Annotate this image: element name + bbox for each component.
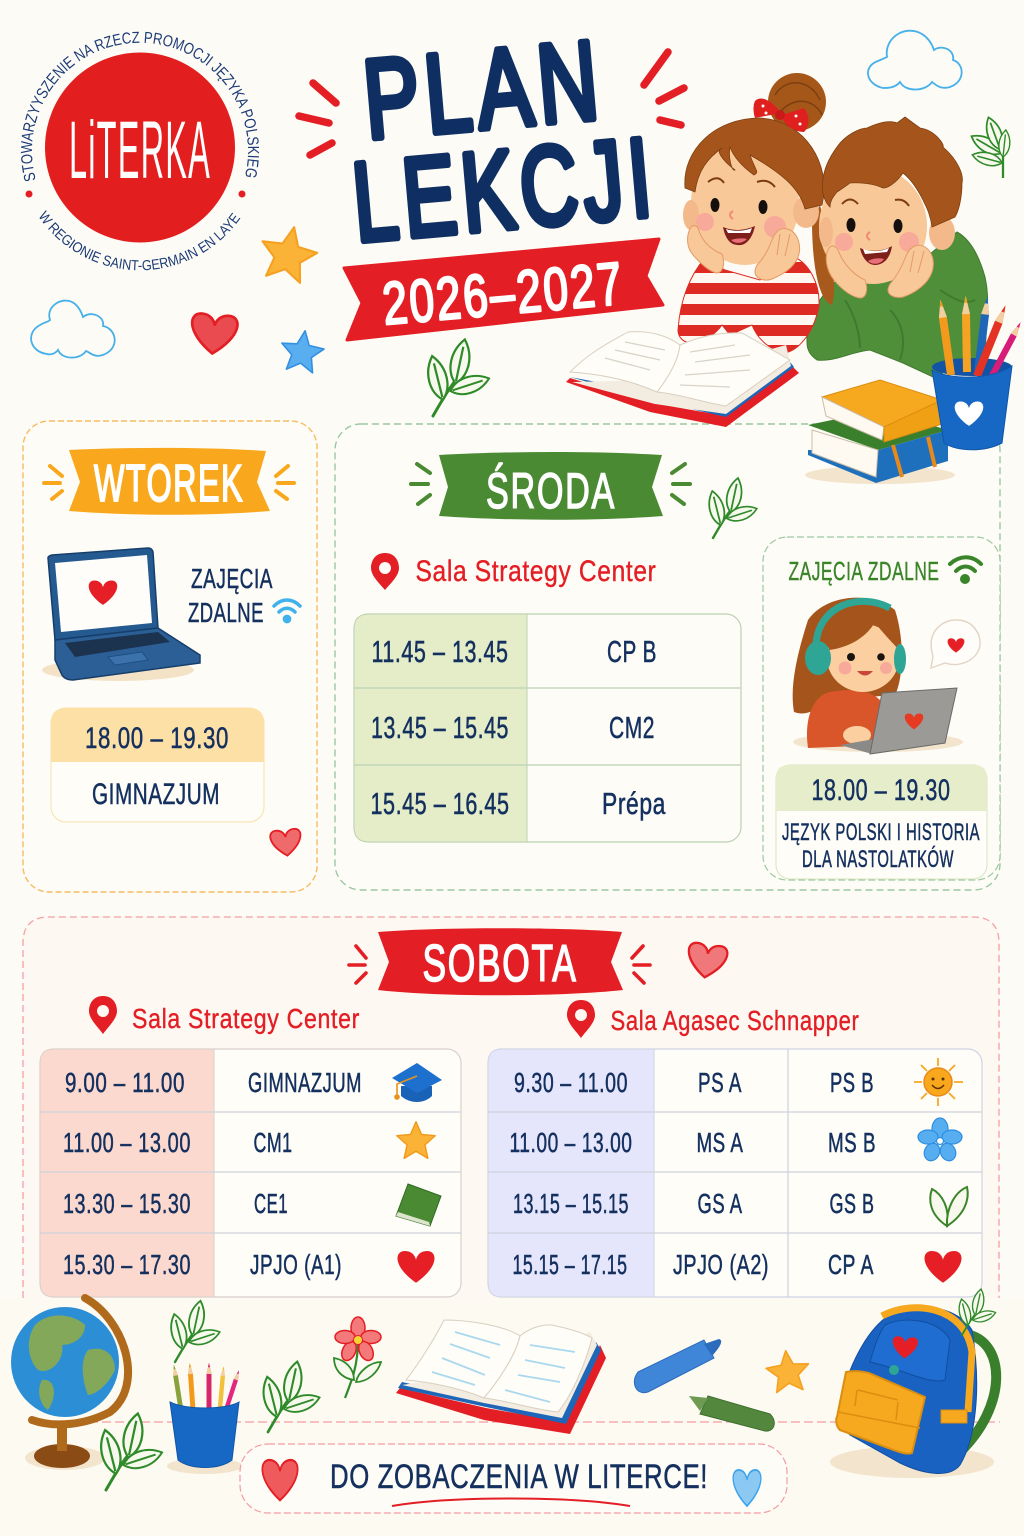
icon: green crayon bbox=[689, 1396, 774, 1431]
icon: map pin bbox=[567, 1000, 595, 1038]
right saturday timetable: CP A bbox=[828, 1249, 874, 1280]
right saturday timetable: 13.15 – 15.15 bbox=[513, 1188, 629, 1219]
left saturday timetable: 15.30 – 17.30 bbox=[63, 1249, 191, 1280]
card: remote language class: ZAJĘCIA ZDALNE bbox=[788, 556, 940, 586]
sroda timetable: 11.45 – 13.45 bbox=[372, 634, 508, 669]
boy head bbox=[819, 117, 962, 298]
icon: flower bbox=[334, 1317, 381, 1398]
right saturday timetable: PS A bbox=[698, 1067, 742, 1098]
icon: blue laptop with heart bbox=[42, 548, 200, 681]
panel: sobota bbox=[23, 917, 1000, 1422]
sobota ribbon heading bbox=[349, 928, 650, 995]
right saturday timetable: MS A bbox=[696, 1127, 744, 1158]
illustration: pencil cup bbox=[167, 1363, 243, 1474]
icon: orange star bbox=[256, 221, 321, 285]
icon: leaf branch bbox=[167, 1299, 222, 1362]
remote class schedule: 18.00 – 19.30 bbox=[812, 774, 950, 807]
illustration: stacked books bbox=[805, 380, 955, 484]
sobota ribbon heading: SOBOTA bbox=[422, 935, 578, 993]
boy hoodie bbox=[807, 232, 988, 377]
remote lessons label: ZDALNE bbox=[188, 597, 264, 628]
right saturday timetable: GS B bbox=[830, 1188, 874, 1219]
logo: literka: W REGIONIE SAINT-GERMAIN EN LAYE bbox=[40, 210, 240, 270]
icon: leaf branch on backpack bbox=[956, 1288, 997, 1335]
title: plan lekcji bbox=[348, 17, 662, 265]
sroda ribbon heading: ŚRODA bbox=[486, 462, 616, 519]
footer pill bbox=[240, 1444, 787, 1513]
icon: leaf branch bbox=[706, 477, 759, 538]
left saturday timetable: GIMNAZJUM bbox=[248, 1067, 362, 1098]
icon: leaf branch top right bbox=[968, 115, 1011, 178]
right saturday timetable: 15.15 – 17.15 bbox=[512, 1249, 628, 1280]
sroda timetable bbox=[354, 614, 741, 842]
right saturday timetable: 11.00 – 13.00 bbox=[510, 1127, 632, 1158]
location: sala agasec schnapper: Sala Agasec Schnapper bbox=[610, 1005, 860, 1036]
illustration: globe bbox=[11, 1298, 128, 1470]
icon: map pin bbox=[89, 996, 117, 1034]
icon: red heart bbox=[925, 1251, 961, 1283]
icon: map pin bbox=[371, 553, 399, 590]
illustration: open book bbox=[566, 332, 799, 427]
icon: graduation cap bbox=[392, 1063, 442, 1102]
left saturday timetable: JPJO (A1) bbox=[250, 1249, 342, 1280]
left saturday timetable: 11.00 – 13.00 bbox=[63, 1127, 191, 1158]
location: sala strategy center bbox=[89, 996, 360, 1034]
wtorek schedule card: GIMNAZJUM bbox=[92, 778, 220, 811]
illustration: open book bottom bbox=[396, 1320, 606, 1434]
icon: sun bbox=[914, 1058, 963, 1106]
location: sala strategy center: Sala Strategy Center bbox=[416, 555, 656, 588]
sroda timetable: CP B bbox=[607, 634, 657, 669]
right saturday timetable: 9.30 – 11.00 bbox=[514, 1067, 628, 1098]
location: sala strategy center: Sala Strategy Center bbox=[132, 1003, 360, 1034]
left saturday timetable: 13.30 – 15.30 bbox=[63, 1188, 191, 1219]
right saturday timetable: PS B bbox=[830, 1067, 874, 1098]
left saturday timetable bbox=[40, 1049, 461, 1297]
illustration: girl and boy bbox=[670, 73, 988, 377]
footer pill: DO ZOBACZENIA W LITERCE! bbox=[330, 1458, 708, 1496]
remote lessons label bbox=[188, 563, 300, 628]
panel: wtorek bbox=[23, 421, 317, 892]
remote class schedule bbox=[776, 765, 987, 879]
icon: light blue wifi bbox=[274, 600, 300, 622]
remote lessons label: ZAJĘCIA bbox=[191, 563, 273, 594]
icon: orange star bbox=[397, 1122, 435, 1158]
icon: red heart bbox=[190, 313, 238, 355]
right saturday timetable bbox=[488, 1049, 982, 1297]
icon: leaf branch bbox=[423, 338, 491, 416]
icon: green leaves bbox=[930, 1187, 968, 1226]
left saturday timetable: CE1 bbox=[254, 1188, 288, 1219]
icon: red heart bbox=[262, 1460, 298, 1500]
right saturday timetable: GS A bbox=[698, 1188, 742, 1219]
icon: green book bbox=[396, 1184, 441, 1226]
sroda timetable: CM2 bbox=[609, 710, 655, 745]
icon: red sketch heart bbox=[270, 828, 302, 857]
title: plan lekcji: LEKCJI bbox=[348, 114, 662, 265]
icon: blue heart bbox=[733, 1470, 761, 1506]
wtorek ribbon heading: WTOREK bbox=[94, 455, 244, 513]
year ribbon: 2026–2027 bbox=[380, 250, 627, 337]
icon: cloud left bbox=[31, 301, 115, 358]
icon: leaf branch bbox=[96, 1412, 164, 1490]
logo: literka bbox=[20, 32, 260, 270]
wtorek ribbon heading bbox=[44, 448, 294, 515]
bottom background band bbox=[0, 1298, 1024, 1536]
location: sala agasec schnapper bbox=[567, 1000, 860, 1038]
title: plan lekcji: PLAN bbox=[359, 17, 609, 162]
right saturday timetable: JPJO (A2) bbox=[673, 1249, 769, 1280]
icon: cloud right bbox=[868, 31, 962, 89]
sroda timetable: 15.45 – 16.45 bbox=[370, 786, 510, 821]
card: remote language class bbox=[763, 537, 1000, 880]
girl hands bbox=[688, 226, 724, 273]
wtorek schedule card bbox=[51, 708, 264, 822]
icon: sketch heart bbox=[685, 942, 728, 980]
polka dot bow bbox=[754, 99, 808, 132]
icon: red heart bbox=[398, 1251, 434, 1283]
sroda timetable: 13.45 – 15.45 bbox=[371, 710, 509, 745]
girl bbox=[670, 73, 834, 360]
sroda timetable: Prépa bbox=[602, 786, 666, 821]
wtorek schedule card: 18.00 – 19.30 bbox=[85, 722, 229, 755]
title rays bbox=[299, 52, 684, 155]
icon: blue flower bbox=[918, 1118, 962, 1163]
location: sala strategy center bbox=[371, 553, 656, 590]
speech bubble with heart bbox=[931, 620, 980, 668]
logo: literka: STOWARZYYSZENIE NA RZECZ PROMOCJI JĘZYKA POLSKIEG bbox=[20, 32, 260, 182]
panel: sroda bbox=[335, 424, 1000, 890]
illustration: backpack bbox=[830, 1307, 996, 1478]
icon: leaf branch bbox=[259, 1360, 322, 1432]
illustration: girl with headphones and laptop bbox=[793, 598, 963, 754]
left saturday timetable: CM1 bbox=[254, 1127, 292, 1158]
illustration: pencil cup bbox=[932, 296, 1023, 450]
sroda ribbon heading bbox=[411, 452, 690, 520]
icon: blue crayon bbox=[634, 1339, 721, 1393]
right saturday timetable: MS B bbox=[828, 1127, 876, 1158]
icon: orange star bbox=[764, 1348, 811, 1393]
left saturday timetable: 9.00 – 11.00 bbox=[65, 1067, 185, 1098]
logo: literka: LiTERKA bbox=[69, 105, 211, 196]
icon: blue star bbox=[278, 328, 326, 374]
icon: green wifi bbox=[950, 557, 981, 582]
